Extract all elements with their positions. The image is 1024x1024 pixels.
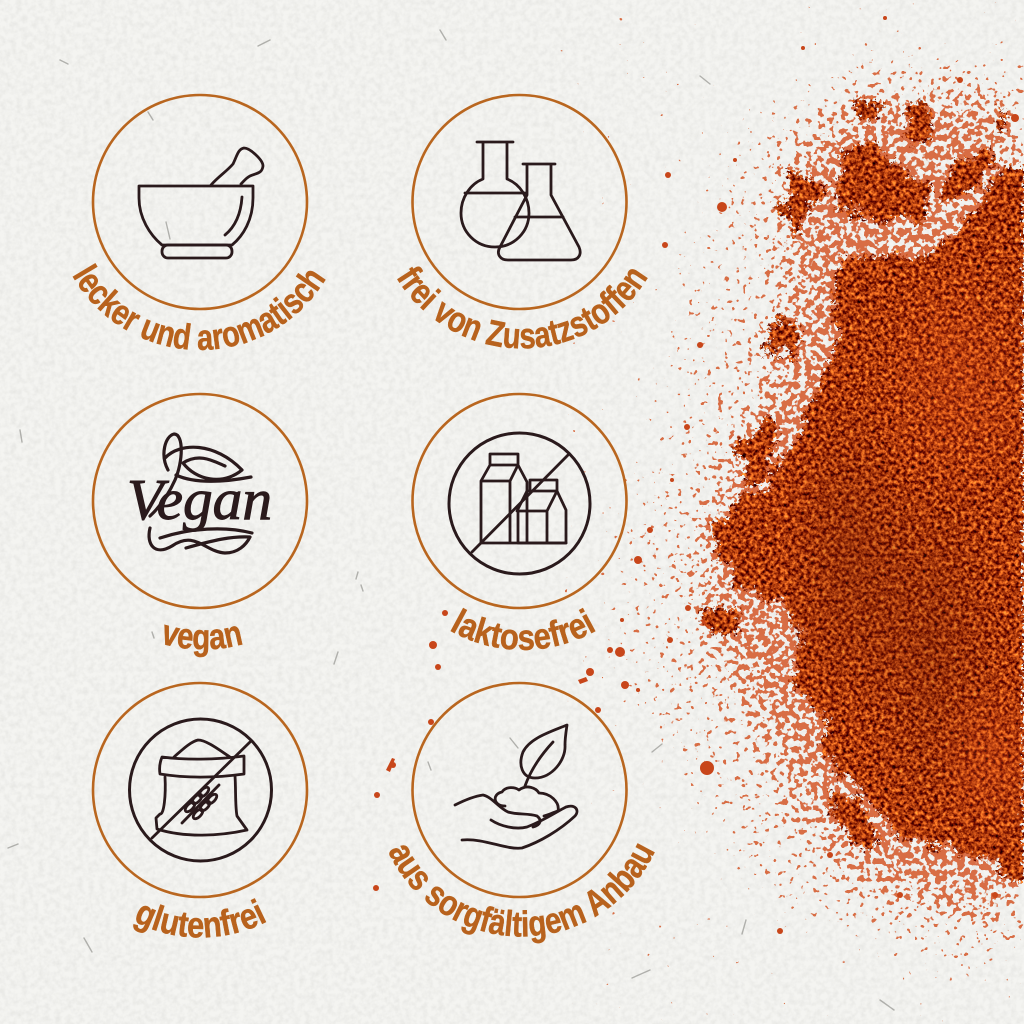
icon: vegan script lettering with leaves: Vegan (127, 467, 272, 532)
spice powder: main pile (700, 100, 1024, 882)
badge: frei von Zusatzstoffen (397, 94, 648, 349)
spice powder: larger flecks (373, 16, 1019, 934)
label: aus sorgfältigem Anbau (389, 843, 655, 944)
label: lecker und aromatisch (72, 263, 326, 350)
label: vegan (164, 624, 242, 658)
label: glutenfrei (133, 898, 266, 938)
badge: glutenfrei (92, 682, 308, 938)
icon: crossed-out milk cartons (449, 433, 590, 574)
icon: laboratory flasks (461, 142, 580, 260)
badge: lecker und aromatisch (72, 94, 326, 350)
icon: mortar and pestle (139, 148, 263, 258)
label: frei von Zusatzstoffen (397, 266, 648, 349)
spice powder: loose scattered specks (610, 50, 1024, 990)
icon: hand holding a seedling (455, 725, 577, 848)
badge: laktosefrei (411, 392, 628, 650)
badge: vegan (92, 392, 308, 658)
label: laktosefrei (450, 608, 596, 650)
icon: crossed-out flour sack (130, 719, 272, 861)
badge: aus sorgfältigem Anbau (389, 682, 655, 944)
icon: vegan script lettering with leaves (127, 434, 272, 553)
